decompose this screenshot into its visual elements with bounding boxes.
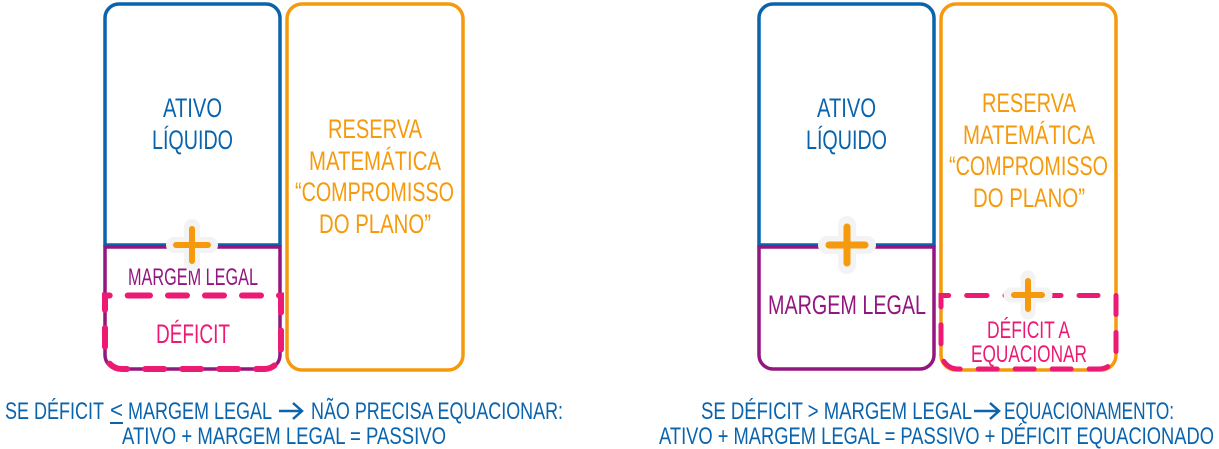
- dashed box: déficit: [105, 296, 281, 369]
- box: reserva matemática: “COMPROMISSO: [949, 151, 1108, 181]
- caption: left rule: <: [110, 397, 123, 424]
- caption: left rule: NÃO PRECISA EQUACIONAR:: [311, 398, 563, 425]
- box: reserva matemática: RESERVA: [982, 88, 1076, 118]
- dashed box: déficit a equacionar: [941, 296, 1116, 369]
- box: reserva matemática: [287, 4, 463, 370]
- dashed box: déficit a equacionar: DÉFICIT A: [987, 317, 1070, 344]
- caption: left rule: SE DÉFICIT: [5, 398, 104, 425]
- dashed box: déficit: DÉFICIT: [156, 319, 230, 349]
- box: ativo líquido: ATIVO: [163, 93, 222, 123]
- box: margem legal: MARGEM LEGAL: [128, 264, 258, 291]
- icon: plus sign between ativo and margem: [827, 225, 867, 265]
- caption: left rule: MARGEM LEGAL: [128, 398, 272, 425]
- box: reserva matemática: MATEMÁTICA: [309, 146, 441, 176]
- box: ativo líquido: ATIVO: [817, 93, 876, 123]
- box: ativo líquido: LÍQUIDO: [806, 125, 887, 155]
- icon: plus sign on déficit line: [1011, 278, 1045, 312]
- icon: plus sign: [174, 227, 210, 263]
- box: margem legal: [759, 247, 934, 369]
- box: ativo líquido: [105, 4, 280, 245]
- panel: right diagram, deficit above legal margin: [759, 4, 1116, 370]
- dashed box: déficit a equacionar: EQUACIONAR: [971, 341, 1087, 368]
- box: margem legal: MARGEM LEGAL: [768, 290, 926, 320]
- box: reserva matemática: [941, 4, 1116, 370]
- box: reserva matemática: DO PLANO”: [319, 209, 431, 239]
- caption: left rule: [5, 397, 563, 449]
- box: reserva matemática: “COMPROMISSO: [295, 177, 454, 207]
- box: reserva matemática: RESERVA: [328, 114, 422, 144]
- box: reserva matemática: DO PLANO”: [973, 183, 1085, 213]
- box: ativo líquido: [759, 4, 934, 245]
- box: reserva matemática: MATEMÁTICA: [963, 120, 1095, 150]
- panel: left diagram, deficit within legal margin: [105, 4, 463, 370]
- box: ativo líquido: LÍQUIDO: [152, 125, 233, 155]
- caption: right rule: SE DÉFICIT > MARGEM LEGAL: [701, 398, 972, 425]
- caption: right rule: [659, 398, 1214, 449]
- box: margem legal: [105, 247, 280, 369]
